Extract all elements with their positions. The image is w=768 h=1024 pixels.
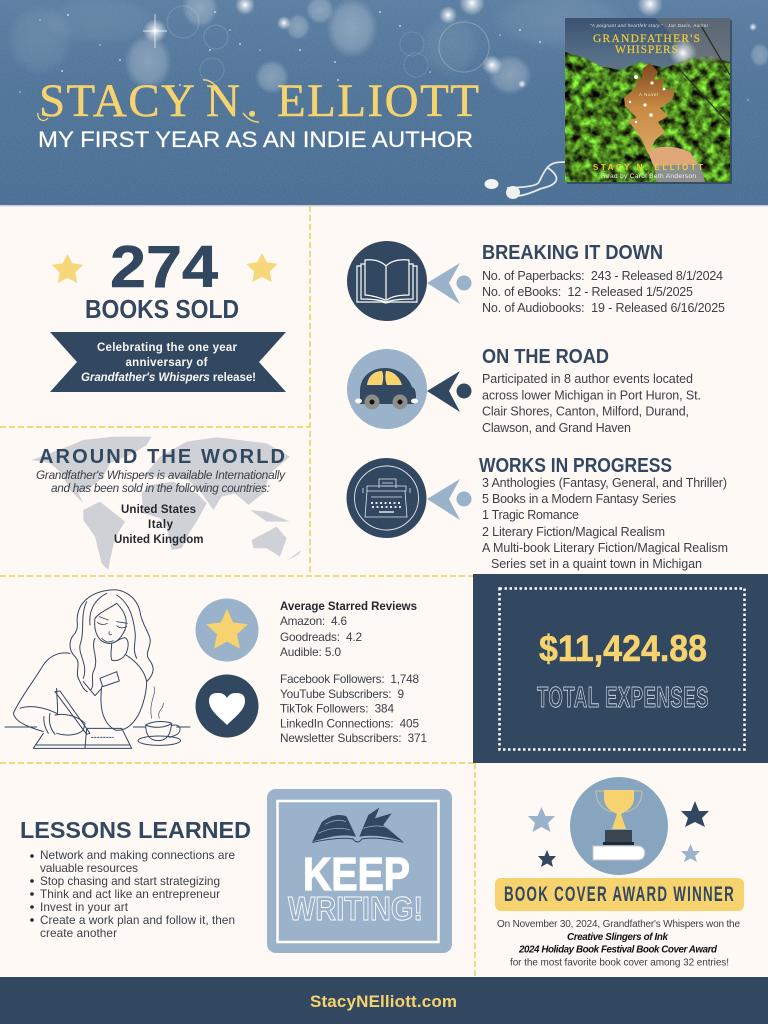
bokeh lights — [6, 0, 768, 101]
world map — [32, 437, 301, 570]
footer: StacyNElliott.com — [310, 992, 457, 1011]
text block: social followers: LinkedIn Connections: 405 — [280, 716, 419, 730]
icon: star circle — [196, 598, 258, 662]
star right — [246, 253, 278, 282]
award text: 2024 Holiday Book Festival Book Cover Award — [518, 944, 718, 956]
icon: car — [347, 349, 427, 429]
ribbon — [50, 332, 286, 392]
text: No. of Paperbacks: 243 - Released 8/1/2024 — [482, 269, 723, 283]
header banner — [0, 0, 768, 206]
country list — [114, 504, 204, 546]
icon: earbuds — [484, 162, 565, 199]
text block: reviews: Audible: 5.0 — [280, 645, 341, 659]
text: 3 Anthologies (Fantasy, General, and Thriller) — [482, 476, 727, 490]
title: ELLIOTT — [277, 75, 479, 127]
arrow — [427, 371, 472, 412]
text block: reviews: Average Starred Reviews — [280, 601, 417, 613]
award text: On November 30, 2024, Grandfather's Whispers won the — [497, 919, 740, 930]
title: STACY — [39, 75, 195, 127]
text: Participated in 8 author events located — [482, 372, 693, 386]
icon: heart circle — [196, 674, 258, 738]
book cover: Read by Carol Beth Anderson — [601, 173, 696, 180]
cover hand — [648, 147, 702, 170]
stars — [528, 807, 555, 832]
award text: for the most favorite book cover among 32 entries! — [510, 958, 729, 968]
divider lines — [0, 206, 475, 977]
ribbon: Celebrating the one year — [97, 342, 238, 354]
text — [482, 372, 701, 435]
books sold heading: BOOKS SOLD — [85, 296, 239, 324]
text: across lower Michigan in Port Huron, St. — [482, 388, 701, 402]
text block: reviews: Goodreads: 4.2 — [280, 630, 362, 644]
text block: reviews — [280, 601, 417, 659]
ribbon: anniversary of — [126, 357, 208, 369]
bullet list: valuable resources — [40, 861, 138, 875]
expense amount: $11,424.88 — [539, 628, 707, 669]
subtitle: MY FIRST YEAR AS AN INDIE AUTHOR — [38, 127, 473, 152]
heading: LESSONS LEARNED — [20, 817, 251, 843]
illustration: woman writing — [5, 590, 190, 748]
text: 1 Tragic Romance — [482, 508, 579, 522]
icon: open book — [312, 808, 403, 842]
panel: breaking it down — [347, 241, 725, 321]
text block: social followers — [280, 672, 427, 745]
panel: books sold — [50, 234, 286, 392]
book cover — [565, 18, 732, 184]
bullet list: create another — [40, 926, 117, 940]
bullet list: Create a work plan and follow it, then — [40, 913, 235, 927]
footer — [0, 977, 768, 1024]
text block: social followers: TikTok Followers: 384 — [280, 702, 394, 716]
panel: works in progress — [346, 455, 728, 571]
panel: on the road — [347, 346, 701, 435]
panel: total expenses — [473, 574, 768, 763]
heading: BREAKING IT DOWN — [482, 242, 663, 264]
book cover: STACY N. ELLIOTT — [593, 163, 703, 172]
award banner — [495, 878, 744, 911]
text: A Multi-book Literary Fiction/Magical Realism — [482, 541, 728, 555]
text block: social followers: Facebook Followers: 1,748 — [280, 672, 419, 686]
text block: social followers: YouTube Subscribers: 9 — [280, 687, 404, 701]
award text — [497, 919, 740, 968]
panel: around the world — [32, 437, 301, 570]
text — [482, 476, 728, 571]
availability text: and has been sold in the following countries: — [51, 481, 270, 495]
panel: lessons learned — [20, 817, 251, 940]
availability text — [36, 468, 286, 495]
text: 2 Literary Fiction/Magical Realism — [482, 525, 665, 539]
heading: AROUND THE WORLD — [39, 446, 285, 468]
number 274: 274 — [110, 234, 218, 300]
star left — [52, 254, 83, 283]
title — [38, 75, 479, 127]
arrow — [427, 479, 472, 520]
text block: reviews: Amazon: 4.6 — [280, 614, 347, 628]
award text: Creative Slingers of Ink — [567, 932, 669, 943]
text: Series set in a quaint town in Michigan — [491, 557, 702, 571]
heading: ON THE ROAD — [482, 346, 609, 368]
book cover: "A poignant and heartfelt story." - Jan Davis, Author — [590, 23, 709, 28]
bullet list: Stop chasing and start strategizing — [40, 874, 220, 888]
panel: keep writing — [267, 789, 452, 953]
book cover: A Novel — [639, 92, 658, 97]
bullet list: Network and making connections are — [40, 848, 235, 862]
cover leaf — [624, 63, 675, 154]
icon: trophy — [570, 777, 668, 875]
writing: WRITING! — [288, 890, 423, 927]
country list: United States — [121, 504, 196, 516]
heading: WORKS IN PROGRESS — [479, 455, 672, 477]
country list: Italy — [148, 519, 174, 531]
text — [482, 269, 725, 315]
book cover: GRANDFATHER'S — [593, 33, 700, 45]
availability text: Grandfather's Whispers is available Internationally — [36, 468, 286, 482]
bullet list: Invest in your art — [40, 900, 129, 914]
icon: open book — [347, 241, 427, 321]
keep: KEEP — [303, 848, 410, 900]
bullet list: Think and act like an entrepreneur — [40, 887, 220, 901]
ribbon: Grandfather's Whispers release! — [81, 372, 256, 384]
text: Clawson, and Grand Haven — [482, 421, 631, 435]
text: 5 Books in a Modern Fantasy Series — [482, 492, 676, 506]
text: No. of Audiobooks: 19 - Released 6/16/2025 — [482, 301, 725, 315]
bullet list — [30, 848, 235, 940]
book cover: WHISPERS — [615, 44, 678, 56]
icon: typewriter — [346, 458, 426, 538]
title: N. — [206, 75, 258, 127]
panel: book cover award — [495, 777, 744, 968]
country list: United Kingdom — [114, 534, 204, 546]
text: No. of eBooks: 12 - Released 1/5/2025 — [482, 285, 693, 299]
arrow — [427, 263, 472, 304]
text block: social followers: Newsletter Subscribers: 371 — [280, 731, 427, 745]
text: Clair Shores, Canton, Milford, Durand, — [482, 404, 689, 418]
